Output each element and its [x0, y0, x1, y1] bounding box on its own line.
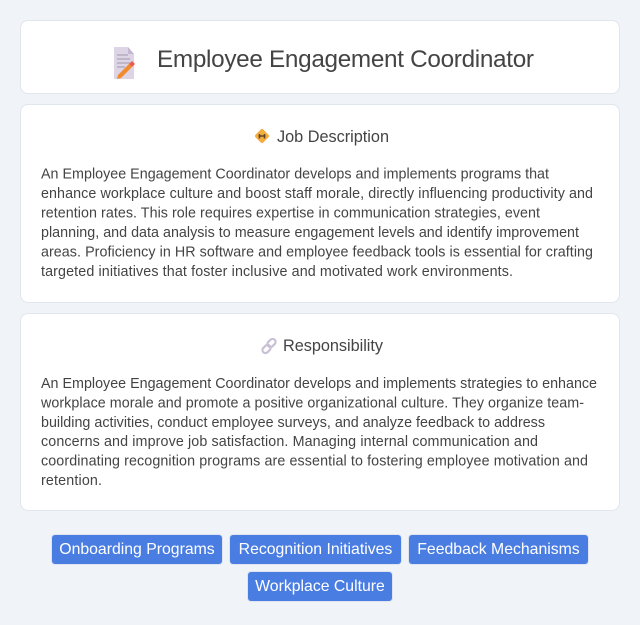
text: responsibility paragraph: workplace morale and promote a positive organizational culture. They organize team-	[40, 396, 584, 412]
panel: job description card	[20, 104, 620, 303]
tag: recognition initiatives	[230, 535, 401, 564]
text: responsibility paragraph: An Employee Engagement Coordinator develops and implements strategies to enhance	[41, 376, 597, 392]
icon: responsibility chain link	[261, 338, 277, 354]
text: responsibility paragraph: building activities, conduct employee surveys, and analyze feedback to address	[41, 415, 545, 431]
text: responsibility paragraph: coordinating recognition programs are essential to fostering employee motivation and	[41, 454, 588, 470]
tag: feedback mechanisms	[409, 535, 588, 564]
text: job description paragraph: retention rates. This role requires expertise in communication strategies, event	[41, 206, 540, 222]
text: job description paragraph: planning, and data analysis to measure engagement levels and identify improvement	[41, 225, 579, 241]
text: responsibility paragraph: retention.	[41, 473, 102, 489]
tag: onboarding programs	[52, 535, 222, 564]
text: job description paragraph: enhance workplace culture and boost staff morale, directly influencing productivity and	[41, 186, 593, 202]
text: job description paragraph: An Employee Engagement Coordinator develops and implements programs that	[41, 166, 549, 182]
icon: document with pencil	[114, 47, 135, 79]
tag: onboarding programs: Onboarding Programs	[59, 541, 215, 558]
panel: title card	[20, 20, 620, 94]
panel: responsibility card	[20, 313, 620, 511]
tag: workplace culture: Workplace Culture	[255, 578, 385, 595]
heading: job description: Job Description	[277, 128, 389, 146]
text: job description paragraph: areas. Proficiency in HR software and employee feedback tools is essential for crafting	[41, 244, 593, 260]
icon: job description diamond	[254, 128, 270, 144]
heading: responsibility: Responsibility	[283, 337, 384, 355]
text: responsibility paragraph	[40, 376, 597, 489]
text: responsibility paragraph: concerns and improve job satisfaction. Managing internal communication and	[41, 434, 538, 450]
text: job description paragraph: targeted initiatives that foster inclusive and motivated work environments.	[41, 264, 513, 280]
tag: workplace culture	[248, 572, 392, 601]
title: Employee Engagement Coordinator	[157, 46, 534, 73]
tag: recognition initiatives: Recognition Initiatives	[239, 541, 392, 558]
tag: feedback mechanisms: Feedback Mechanisms	[417, 541, 580, 558]
text: job description paragraph	[41, 166, 593, 280]
